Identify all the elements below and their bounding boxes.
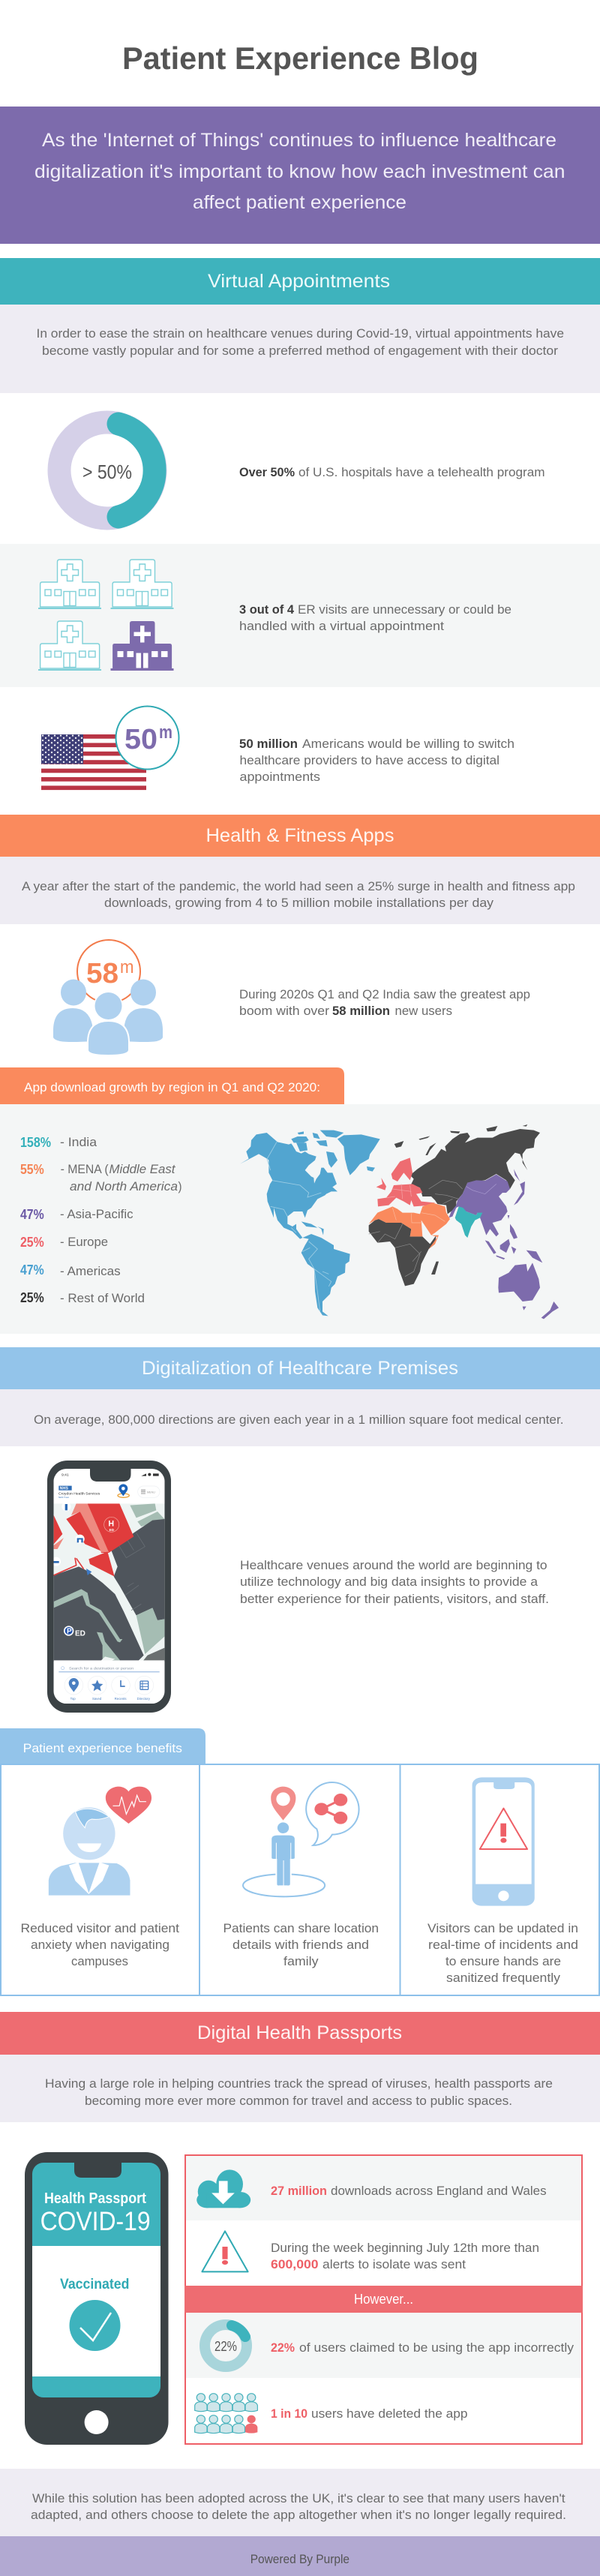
icon: people with 58m badge [53,940,163,1055]
text block: telehealth stat: of U.S. hospitals have a telehealth program [298,465,544,479]
text block: telehealth stat: Over 50% [239,465,295,479]
text block: passports intro: becoming more ever more common for travel and access to public spaces. [85,2094,512,2108]
text block: health and fitness intro: downloads, growing from 4 to 5 million mobile installations per day [104,896,494,910]
row: alerts: During the week beginning July 12th more than [271,2241,539,2255]
text block: virtual appointments intro: In order to ease the strain on healthcare venues during Covid-19, virtual appointments have [36,326,564,341]
map screen: P [67,1628,72,1636]
icon: warning triangle [202,2231,248,2271]
icon: 1 in 10 people [195,2394,257,2433]
text block: benefit 2: details with friends and [232,1938,369,1952]
text block: benefit 3 [428,1921,578,1985]
legend: regions: ) [178,1179,182,1193]
panel: intro banner: As the 'Internet of Things' continues to influence healthcare [42,130,556,151]
map: Americas [240,1130,380,1316]
tab: app download growth [0,1067,344,1104]
text block: benefit 3: sanitized frequently [446,1971,561,1985]
text block: 50 million stat: 50 million [239,737,298,751]
heading: Health & Fitness Apps: Health & Fitness Apps [206,825,394,846]
text block: ER visits stat [239,602,512,633]
map screen: Saved [92,1697,102,1701]
text block: India boom: new users [394,1004,452,1018]
map screen: H [108,1519,114,1528]
panel: intro banner: digitalization it's important to know how each investment can [34,161,565,182]
banner: however [184,2286,583,2313]
icon: US flag with 50m badge [41,707,178,790]
text block: passports intro: Having a large role in helping countries track the spread of viruses, health passports are [45,2076,553,2091]
heading: Digital Health Passports: Digital Health Passports [197,2022,402,2043]
map screen: MENU [147,1491,155,1494]
text block: 50 million stat: healthcare providers to have access to digital [240,753,500,767]
legend: regions: 47% [20,1207,44,1222]
text block: benefit 3: real-time of incidents and [428,1938,578,1952]
map screen: NHS Trust [58,1496,69,1499]
text block: India boom: 58 million [332,1004,390,1018]
text block: India boom: boom with over [239,1004,329,1018]
icon: calm patient with heart [49,1787,152,1896]
app header [52,1476,165,1503]
icon: four hospitals [38,560,174,671]
map screen: NHS [60,1487,68,1491]
text block: healthcare venues: Healthcare venues around the world are beginning to [240,1558,548,1572]
legend: regions: - Americas [60,1264,121,1278]
map screen: ED [75,1630,86,1638]
text block: health and fitness intro: A year after the start of the pandemic, the world had seen a 25% surge in health and fitness app [22,879,575,893]
icon: people with 58m badge: m [120,957,134,977]
map: Rest of world, Europe, MENA, Asia-Pacific and India [367,1124,559,1319]
heading: Health & Fitness Apps [0,815,600,857]
text block: 50 million stat: appointments [240,770,320,784]
footer: Powered By Purple [250,2552,350,2566]
chart: world map [240,1124,559,1319]
text block: virtual appointments intro [0,305,600,393]
legend: regions: - Rest of World [60,1291,145,1305]
map screen: 9:41 [62,1473,69,1478]
text block: ER visits stat: handled with a virtual appointment [239,619,444,633]
footer [0,2536,600,2576]
map screen: Directory [137,1697,151,1701]
map screen: Search for a destination or person [69,1667,134,1671]
text block: benefit 1: campuses [71,1954,128,1968]
map screen [52,1473,165,1705]
text block: healthcare venues: better experience for their patients, visitors, and staff. [240,1592,549,1606]
chart: 22% donut: 22% [214,2339,237,2354]
legend: regions: - Asia-Pacific [60,1207,134,1221]
text block: 22% of users: of users claimed to be using the app incorrectly [299,2340,574,2355]
tab: app download growth: App download growth by region in Q1 and Q2 2020: [24,1080,320,1094]
text block: India boom [239,987,530,1018]
text block: benefit 2 [224,1921,379,1968]
panel: regional growth [0,1104,600,1334]
legend: regions: and North America [70,1179,178,1193]
heading: Virtual Appointments [0,258,600,305]
row: alerts: 600,000 [271,2257,318,2271]
text block: passports intro [0,2055,600,2122]
text block: directions stat [0,1389,600,1446]
chart: over 50% donut: > 50% [82,461,132,483]
text block: conclusion [0,2469,600,2536]
panel: intro banner: affect patient experience [193,192,406,213]
legend: regions: 47% [20,1262,44,1277]
row: alerts: alerts to isolate was sent [322,2257,466,2271]
text block: benefit 3: to ensure hands are [446,1954,561,1968]
icon: cloud download [196,2169,250,2208]
row: downloads [196,2169,547,2208]
icon: phone alert [472,1777,535,1906]
icon: phone with health passport: Health Passport [44,2190,146,2207]
text block: virtual appointments intro: become vastly popular and for some a preferred method of engagement with their doctor [42,344,558,358]
map screen: Croydon Health Services [58,1492,100,1496]
banner: however: However... [354,2292,413,2307]
map screen: Recents [115,1697,127,1701]
icon: location sharing [243,1782,359,1896]
heading: Digitalization of Healthcare Premises [0,1347,600,1389]
icon: phone with health passport: Vaccinated [60,2277,129,2292]
text block: benefit 1 [21,1921,179,1968]
panel: ER visits [0,544,600,687]
text block: 1 in 10 users: 1 in 10 [271,2406,308,2421]
text block: 50 million stat [239,737,514,784]
text block: healthcare venues: utilize technology and big data insights to provide a [240,1575,538,1589]
panel: passport stats [184,2155,583,2444]
map screen: ED [110,1528,115,1532]
text block: India boom: During 2020s Q1 and Q2 India saw the greatest app [239,987,530,1001]
row: downloads: downloads across England and Wales [331,2184,547,2198]
panel: intro banner [0,107,600,244]
text block: 50 million stat: Americans would be willing to switch [302,737,514,751]
text block: benefit 3: Visitors can be updated in [428,1921,578,1935]
map screen: Top [70,1697,76,1701]
tab: patient experience benefits: Patient experience benefits [23,1741,182,1755]
text block: benefit 1: Reduced visitor and patient [21,1921,179,1935]
bottom navigation [54,1660,164,1705]
text block: conclusion: While this solution has been adopted across the UK, it's clear to see that many users haven't [32,2491,566,2505]
text block: health and fitness intro [0,857,600,924]
heading: Digitalization of Healthcare Premises: Digitalization of Healthcare Premises [142,1358,458,1379]
text block: conclusion: adapted, and others choose to delete the app altogether when it's no longer legally required. [31,2508,566,2522]
text block: benefit 2: Patients can share location [224,1921,379,1935]
legend: regions [20,1135,182,1305]
chart: 22% donut [205,2325,247,2367]
title: Patient Experience Blog [122,41,478,76]
text block: directions stat: On average, 800,000 directions are given each year in a 1 million square foot medical center. [34,1413,564,1427]
icon: phone with health passport [25,2152,168,2445]
text block: healthcare venues [240,1558,549,1606]
heading: Virtual Appointments: Virtual Appointments [208,271,390,292]
icon: phone with wayfinding app [47,1461,171,1713]
icon: people with 58m badge: 58 [86,958,118,989]
legend: regions: - Europe [60,1235,108,1249]
text block: 22% of users: 22% [271,2340,295,2355]
legend: regions: Middle East [110,1162,176,1176]
text block: benefit 1: anxiety when navigating [31,1938,170,1952]
icon: US flag with 50m badge: 50 [124,724,158,755]
legend: regions: 158% [20,1135,51,1150]
legend: regions: 25% [20,1290,44,1305]
legend: regions: 25% [20,1235,44,1250]
legend: regions: - India [60,1135,98,1149]
text block: ER visits stat: 3 out of 4 [239,602,295,617]
legend: regions: - MENA ( [61,1162,109,1176]
icon: US flag with 50m badge: m [159,722,172,743]
legend: regions: 55% [20,1162,44,1177]
text block: ER visits stat: ER visits are unnecessary or could be [298,602,512,617]
row: downloads: 27 million [271,2184,327,2198]
chart: over 50% donut [59,422,155,518]
panel: benefits grid [1,1764,599,1995]
tab: patient experience benefits [0,1728,206,1764]
text block: benefit 2: family [284,1954,319,1968]
text block: 1 in 10 users: users have deleted the app [311,2406,468,2421]
row: alerts [202,2231,539,2271]
heading: Digital Health Passports [0,2012,600,2055]
icon: phone with health passport: COVID-19 [40,2207,151,2236]
